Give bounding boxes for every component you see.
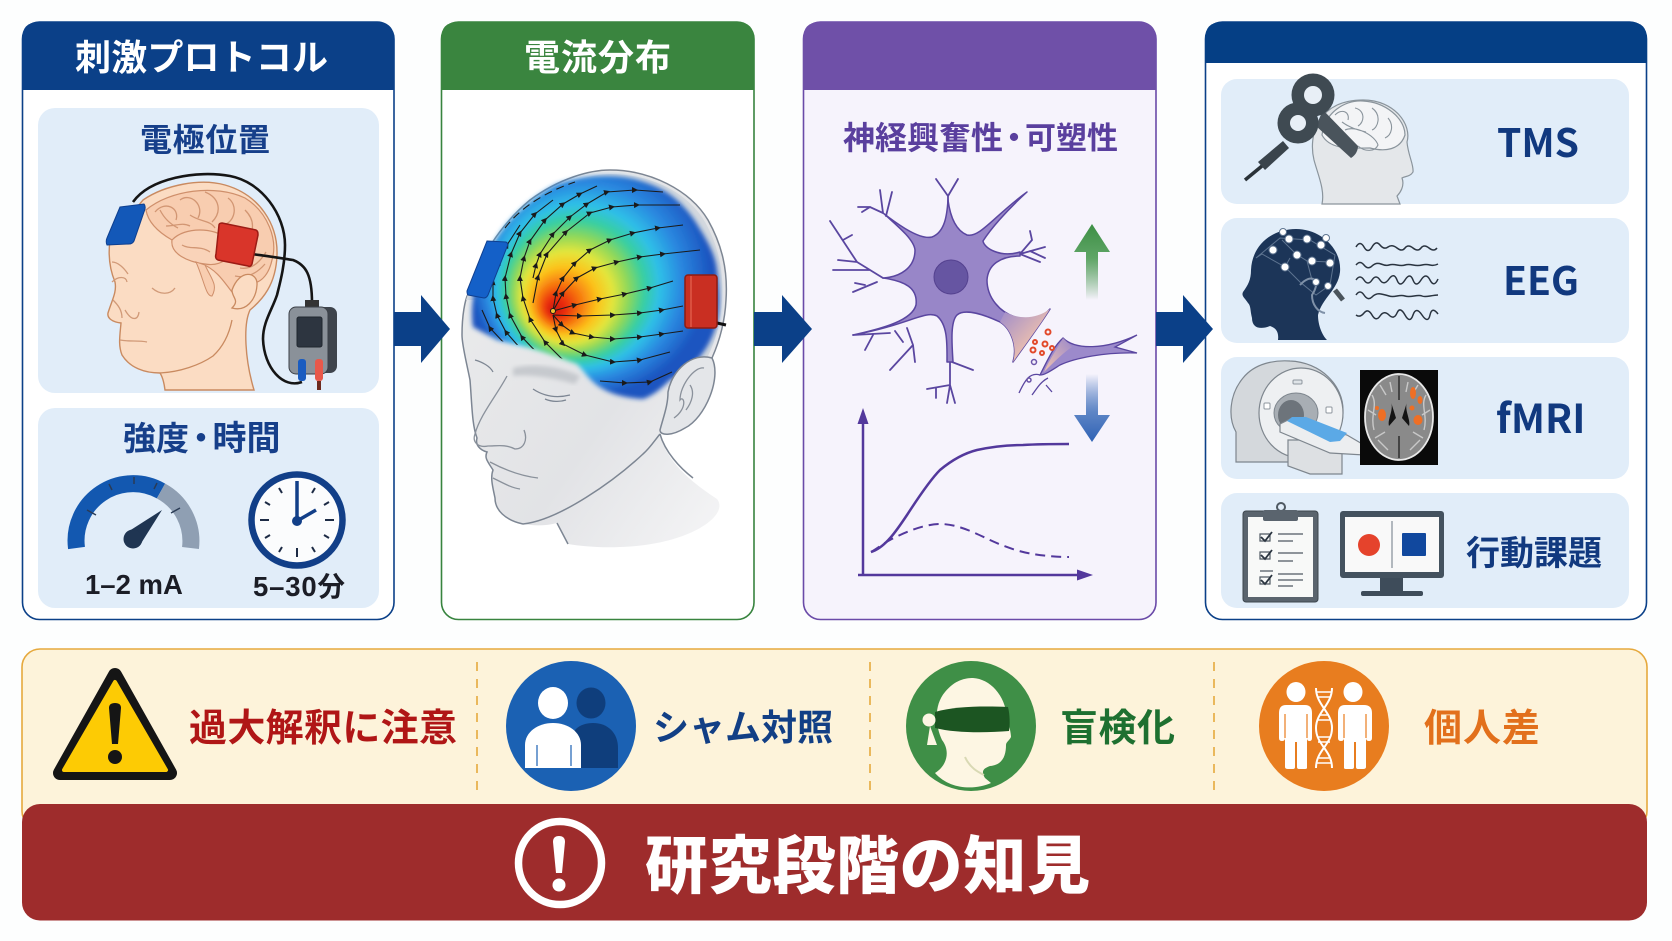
- icon: clock: [252, 474, 342, 566]
- chart: response curves: [858, 408, 1093, 580]
- panel: caution factors: [22, 649, 1647, 829]
- icon: exclamation circle: [518, 822, 602, 904]
- heading: 研究段階の知見: 研究段階の知見: [645, 816, 1090, 907]
- sub-panel: electrode position: [38, 108, 379, 393]
- header: current distribution: [441, 22, 754, 90]
- arrow: current to neuron: [754, 295, 812, 363]
- label: EEG: EEG: [1503, 251, 1579, 307]
- row: behavioural tasks: [1221, 493, 1629, 608]
- icon: TMS coil and head: [1245, 74, 1413, 204]
- panel: measurement methods: [1205, 22, 1647, 620]
- panel: neural excitability: [803, 22, 1156, 620]
- heading: 刺激プロトコル: 刺激プロトコル: [75, 29, 328, 81]
- arrow: neuron to measurement: [1156, 295, 1213, 363]
- header: stimulation protocol: [22, 22, 394, 90]
- label: 盲検化: 盲検化: [1060, 697, 1175, 752]
- heading: 電流分布: 電流分布: [524, 29, 671, 81]
- icon: MRI scanner: [1231, 361, 1364, 474]
- panel: stimulation protocol: [22, 22, 394, 620]
- icon: EEG waves: [1356, 243, 1438, 320]
- label: 個人差: 個人差: [1424, 697, 1540, 752]
- label: シャム対照: シャム対照: [653, 699, 833, 751]
- arrow: decrease: [1074, 374, 1110, 442]
- label: 5–30分: 5–30分: [253, 571, 346, 602]
- sub-panel: intensity and duration: [38, 408, 379, 608]
- icon: warning triangle: [60, 675, 170, 773]
- sub-heading: 電極位置: 電極位置: [140, 115, 270, 161]
- header: measurement methods (blank): [1205, 22, 1647, 63]
- sub-heading: 強度・時間: 強度・時間: [123, 411, 280, 460]
- panel: current distribution: [441, 22, 754, 620]
- icon: sham control people: [506, 661, 636, 791]
- row: TMS: [1221, 74, 1629, 204]
- icon: fMRI brain scan: [1360, 370, 1438, 465]
- label: TMS: TMS: [1497, 113, 1579, 169]
- label: 1–2 mA: 1–2 mA: [85, 569, 183, 600]
- heading: 神経興奮性・可塑性: 神経興奮性・可塑性: [843, 113, 1118, 159]
- row: EEG: [1221, 218, 1629, 343]
- banner: research-stage findings: [22, 804, 1647, 920]
- icon: head with electrodes and stimulator: [106, 174, 337, 390]
- header: neural excitability (blank): [803, 22, 1156, 90]
- icon: individual differences DNA: [1259, 661, 1389, 791]
- label: 過大解釈に注意: 過大解釈に注意: [189, 697, 457, 752]
- arrow: protocol to current: [394, 295, 450, 363]
- arrow: increase: [1074, 224, 1110, 300]
- label: fMRI: fMRI: [1496, 387, 1585, 445]
- icon: blindfold head: [906, 661, 1036, 791]
- icon: monitor task: [1340, 511, 1444, 596]
- illustration: head with current heat map: [462, 170, 726, 547]
- icon: clipboard: [1243, 503, 1318, 602]
- illustration: neuron and synapse: [830, 179, 1137, 403]
- icon: gauge: [76, 477, 191, 548]
- row: fMRI: [1221, 357, 1629, 479]
- icon: EEG cap: [1242, 228, 1343, 340]
- label: 行動課題: 行動課題: [1466, 526, 1602, 575]
